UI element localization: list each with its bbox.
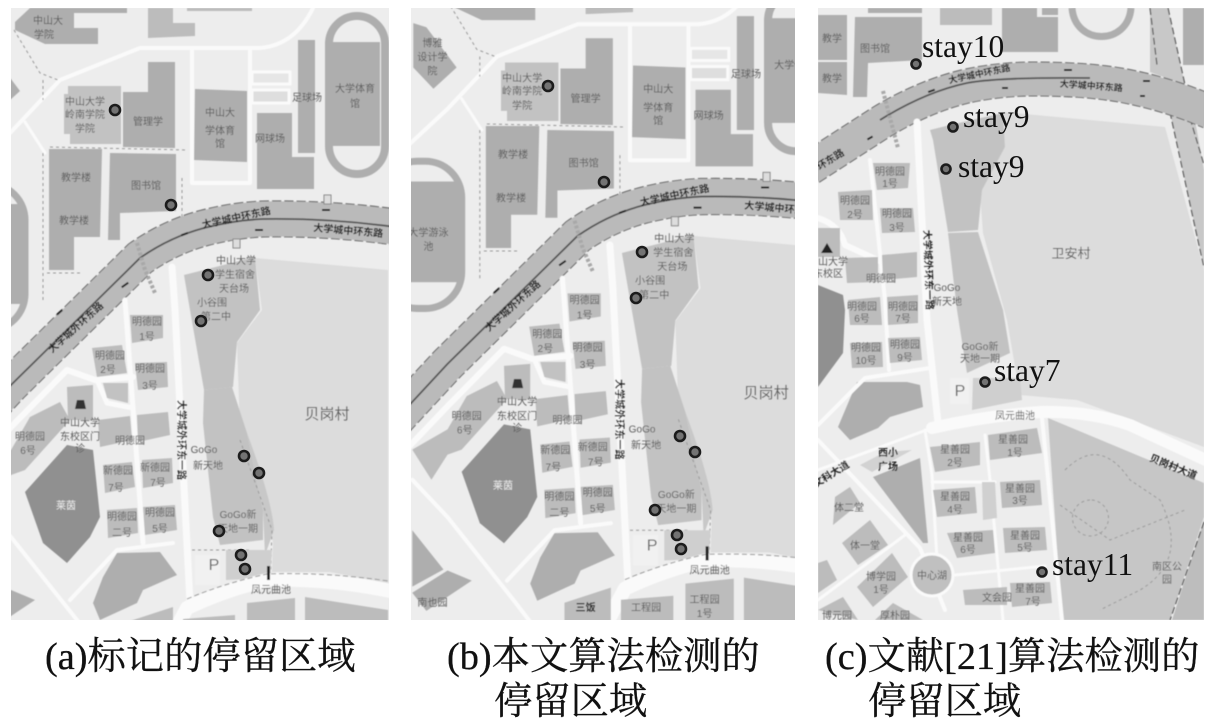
map: campus base map a: 中山大 — [33, 14, 63, 27]
caption: panel c: 停留区域 — [868, 680, 1021, 723]
map: campus base map a: 学体育 — [205, 124, 235, 137]
map: campus base map b: 大学城外环东一路 — [613, 379, 626, 460]
map: campus base map a: 莱茵 — [56, 500, 76, 512]
map: campus base map c: 明德园 — [875, 165, 905, 178]
map: campus base map b: 教学楼 — [496, 192, 526, 205]
map: campus base map a: 明德园 — [132, 315, 162, 328]
marker: detected stay 1 — [543, 81, 553, 91]
map: campus base map a: 中山大学 — [60, 416, 100, 429]
map: campus base map b: 足球场 — [731, 68, 761, 81]
map: campus base map c: 5号 — [1017, 542, 1033, 554]
map: campus base map a: 6号 — [20, 445, 36, 457]
map: campus base map a: 网球场 — [255, 132, 285, 145]
map: campus base map c: 体一堂 — [850, 540, 880, 552]
map: campus base map b: 中山大学 — [654, 232, 695, 245]
map: campus base map b: 明德园 — [544, 490, 575, 503]
map: campus base map a: 3号 — [142, 380, 158, 392]
map: campus base map c: 博学园 — [866, 570, 896, 583]
map: campus base map c: 东校区 — [813, 267, 843, 280]
map: campus base map a: 新天地 — [193, 459, 223, 472]
panel: (c) stay regions detected by algorithm of reference 21 — [806, 8, 1210, 622]
map: campus base map c: 1号 — [1007, 447, 1023, 459]
map: campus base map b: 明德园 — [573, 341, 603, 354]
map: campus base map b: 大学城外环东路 — [482, 277, 543, 334]
map: campus base map c: 明德园 — [888, 300, 918, 313]
map: campus base map c: 西小 — [878, 446, 898, 459]
map: campus base map a: 管理学 — [133, 115, 163, 128]
map: campus base map b: 1号 — [697, 608, 712, 620]
marker: stay point 9 — [240, 564, 250, 574]
map: campus base map c: 3号 — [1012, 495, 1028, 507]
map: campus base map c: 明德园 — [890, 338, 920, 351]
marker: detected stay 8 — [672, 530, 682, 540]
map: campus base map c: 6号 — [854, 313, 870, 325]
marker: detected stay 7 — [650, 505, 660, 515]
map: campus base map a: 明德园 — [95, 349, 125, 362]
map: campus base map a: 7号 — [150, 477, 166, 489]
map: campus base map c: 中环东路 — [806, 146, 847, 178]
map: campus base map b: 岭南学院 — [502, 85, 542, 98]
map: campus base map a: 大学城外环东路 — [45, 299, 106, 356]
map: campus base map b: 教学楼 — [498, 148, 528, 161]
map: campus base map b: 天台场 — [657, 260, 687, 273]
map: campus base map c: 文会园 — [982, 591, 1012, 604]
map: campus base map c: 卫安村 — [1051, 246, 1091, 261]
map: campus base map c: 大学城中环东路 — [947, 62, 1011, 86]
map: campus base map a: 岭南学院 — [65, 108, 105, 121]
map: campus base map c: 体二堂 — [834, 502, 864, 514]
map: campus base map c: GoGo新 — [962, 340, 998, 353]
map: campus base map c: 星善园 — [998, 433, 1028, 446]
marker: stay point 4 — [196, 316, 206, 326]
map: campus base map a: 东校区门 — [60, 430, 100, 443]
map: campus base map b: 贝岗村 — [743, 385, 789, 402]
map: campus base map c: 2号 — [847, 209, 863, 221]
map: campus base map b: 天地一期 — [656, 502, 697, 515]
map: campus base map c: 园 — [1162, 574, 1172, 586]
marker: stay point 6 — [254, 468, 264, 478]
map: campus base map c: 明德园 — [840, 194, 870, 207]
map: campus base map b: 网球场 — [693, 109, 724, 122]
map: campus base map a: 5号 — [152, 523, 168, 535]
map: campus base map c: P — [955, 383, 965, 400]
map: campus base map b: 池 — [423, 240, 433, 253]
map: campus base map a: 二号 — [112, 527, 132, 539]
caption: panel a: (a)标记的停留区域 — [45, 635, 356, 678]
label: stay10 with marker: stay10 — [922, 29, 1004, 64]
panel: (b) stay regions detected by this paper's algorithm — [411, 8, 795, 620]
map: campus base map a: 7号 — [108, 482, 124, 494]
map: campus base map a: 天台场 — [219, 282, 249, 295]
map: campus base map b: 诊 — [512, 421, 522, 434]
label: stay9 upper with marker: stay9 — [963, 99, 1030, 134]
map: campus base map c: 星善园 — [940, 490, 970, 503]
map: campus base map c: 星善园 — [940, 443, 970, 456]
map: campus base map c: 明德园 — [851, 341, 881, 354]
map: campus base map c: 明德园 — [882, 207, 912, 220]
map: campus base map a: 明德园 — [107, 510, 137, 523]
map: campus base map c: 中山大学 — [808, 255, 848, 268]
map: campus base map b: 三饭 — [576, 601, 596, 614]
label: stay11 with marker — [1036, 554, 1132, 582]
caption: panel b — [447, 635, 760, 723]
map: campus base map c: 明德园 — [866, 272, 896, 285]
map: campus base map b: 图书馆 — [569, 156, 599, 169]
map: campus base map c: 中心湖 — [917, 569, 947, 582]
caption: panel b: (b)本文算法检测的 — [447, 635, 760, 678]
map: campus base map a: 教学楼 — [59, 214, 89, 227]
map: campus base map a: 凤元曲池 — [251, 583, 291, 596]
map: campus base map a: 新德园 — [103, 464, 133, 477]
map: campus base map b: 明德园 — [570, 293, 600, 306]
map: campus base map a: 新德园 — [140, 461, 170, 474]
map: campus base map a: 明德园 — [15, 430, 45, 443]
map: campus base map b — [411, 8, 795, 620]
map: campus base map b: 明德园 — [552, 413, 583, 426]
map: campus base map a: 中山大学 — [65, 95, 105, 108]
map: campus base map a: 大学城中环东路 — [201, 204, 272, 231]
map: campus base map b: 大学城中环东路 — [639, 181, 710, 209]
label: stay10 with marker — [910, 36, 1004, 70]
map: campus base map a — [0, 8, 395, 650]
map: campus base map c: 星善园 — [1010, 529, 1040, 542]
map: campus base map b: 大学体育 — [774, 59, 814, 72]
map: campus base map a: 天地一期 — [218, 522, 258, 535]
map: campus base map b: 第二中 — [639, 288, 669, 301]
map: campus base map b: 6号 — [457, 424, 473, 436]
map: campus base map b: 馆 — [653, 114, 663, 127]
map: campus base map a: 学院 — [75, 122, 95, 135]
map: campus base map a: GoGo — [191, 445, 218, 456]
label: stay7 with marker: stay7 — [994, 353, 1060, 388]
map: campus base map b: 二号 — [549, 507, 570, 519]
map: campus base map c: 7号 — [895, 313, 911, 325]
marker: detected stay 4 — [631, 293, 641, 303]
map: campus base map c: 明德园 — [847, 300, 877, 313]
map: campus base map b: 大学城中环东路 — [744, 199, 815, 218]
marker: stay point 1 — [110, 105, 120, 115]
map: campus base map c: 4号 — [947, 504, 963, 516]
map: campus base map a: 2号 — [100, 364, 116, 376]
marker: detected stay 2 — [599, 177, 609, 187]
map: campus base map c: 1号 — [882, 178, 898, 190]
map: campus base map c: 2号 — [947, 457, 963, 469]
marker: detected stay 9 — [676, 544, 686, 554]
map: campus base map b: 工程园 — [631, 602, 661, 614]
marker: stay point 8 — [236, 550, 246, 560]
map: campus base map b: 学生宿舍 — [653, 246, 694, 259]
marker: detected stay 3 — [637, 247, 647, 257]
map: campus base map b: GoGo — [629, 424, 656, 435]
map: campus base map c: 博元园 — [822, 609, 852, 622]
label: stay7 with marker — [979, 360, 1060, 388]
map: campus base map b: 院 — [427, 65, 437, 78]
label: stay11 with marker: stay11 — [1052, 547, 1133, 582]
map: campus base map a: 1号 — [139, 331, 155, 343]
map: campus base map b: 莱茵 — [493, 480, 513, 492]
map: campus base map b: 5号 — [590, 503, 606, 515]
map: campus base map a: 馆 — [350, 97, 360, 110]
map: campus base map c: 教学 — [822, 32, 842, 45]
map: campus base map c: 7号 — [1025, 596, 1041, 608]
map: campus base map b: 中山大 — [643, 83, 673, 96]
caption: panel b: 停留区域 — [494, 680, 647, 723]
map: campus base map c: 贝岗村大道 — [1148, 451, 1199, 482]
map: campus base map b: 7号 — [588, 457, 604, 469]
map: campus base map b: 东校区门 — [497, 409, 537, 422]
map: campus base map a: 馆 — [215, 137, 225, 150]
map: campus base map b: 设计学 — [417, 50, 448, 63]
caption: panel c — [825, 635, 1199, 723]
label: stay9 upper with marker — [947, 106, 1028, 134]
map: campus base map b: 新德园 — [578, 441, 608, 454]
caption: panel c: (c)文献[21]算法检测的 — [825, 635, 1199, 678]
map: campus base map b: 3号 — [580, 359, 596, 371]
map: campus base map a: 图书馆 — [131, 179, 161, 192]
map: campus base map b: 管理学 — [571, 92, 601, 105]
map: campus base map a: 足球场 — [292, 91, 322, 104]
map: campus base map c: 南区公 — [1152, 560, 1182, 573]
map: campus base map c: 大学城外环东一路 — [921, 230, 936, 310]
map: campus base map b: GoGo新 — [658, 488, 695, 501]
map: campus base map c: 图书馆 — [860, 42, 890, 55]
map: campus base map b: 博雅 — [422, 36, 443, 49]
marker: detected stay 6 — [690, 447, 700, 457]
map: campus base map b: 南也园 — [417, 596, 448, 609]
map: campus base map a: 小谷围 — [197, 297, 227, 309]
map: campus base map c: 教学 — [822, 72, 842, 85]
map: campus base map a: 中山大学 — [216, 254, 256, 267]
map: campus base map a: 大学城中环东路 — [313, 221, 384, 240]
map: campus base map c: 凤元曲池 — [995, 409, 1035, 422]
map: campus base map b: 新天地 — [631, 439, 661, 452]
map: campus base map b: 明德园 — [583, 486, 613, 499]
map: campus base map c — [806, 8, 1210, 622]
map: campus base map c: 大学城中环东路 — [1059, 78, 1123, 93]
map: campus base map a: 明德园 — [135, 362, 165, 375]
map: campus base map a: 学院 — [34, 28, 54, 41]
marker: stay point 3 — [203, 270, 213, 280]
label: stay9 lower with marker: stay9 — [958, 149, 1024, 184]
map: campus base map a: 明德园 — [145, 506, 175, 519]
map: campus base map c: 1号 — [873, 584, 889, 596]
map: campus base map a: 贝岗村 — [304, 406, 350, 423]
map: campus base map c: GoGo — [934, 283, 961, 294]
marker: stay point 7 — [214, 526, 224, 536]
map: campus base map a: P — [209, 557, 219, 574]
map: campus base map c: 6号 — [960, 544, 976, 556]
map: campus base map a: 诊 — [75, 442, 85, 455]
map: campus base map c: 3号 — [889, 222, 905, 234]
map: campus base map b: 凤元曲池 — [689, 564, 730, 577]
map: campus base map c: 文科大道 — [811, 458, 852, 490]
marker: detected stay 5 — [675, 431, 685, 441]
map: campus base map b: 大学游泳 — [408, 226, 449, 239]
map: campus base map a: 明德园 — [115, 434, 145, 447]
map: campus base map a: GoGo新 — [220, 508, 256, 521]
map: campus base map a: 大学体育 — [335, 82, 375, 95]
map: campus base map b: 1号 — [577, 310, 592, 322]
map: campus base map b: 中山大学 — [502, 72, 542, 85]
map: campus base map b: 学体育 — [643, 101, 673, 114]
map: campus base map c: 厚朴园 — [880, 609, 910, 622]
map: campus base map a: 第二中 — [201, 310, 231, 323]
map: campus base map b: 小谷围 — [635, 275, 665, 287]
label: stay9 lower with marker — [940, 156, 1024, 184]
map: campus base map a: 学生宿舍 — [215, 268, 255, 281]
map: campus base map c: 新天地 — [932, 295, 962, 308]
map: campus base map c: 星善园 — [1005, 482, 1035, 495]
map: campus base map b: 新德园 — [540, 444, 571, 457]
map: campus base map c: 9号 — [897, 352, 913, 364]
map: campus base map c: 星善园 — [1015, 582, 1045, 595]
map: campus base map b: 7号 — [546, 462, 561, 474]
panel: (a) labelled stay regions map — [0, 8, 395, 650]
map: campus base map b: 中山大学 — [497, 395, 537, 408]
map: campus base map c: 天地一期 — [960, 352, 1000, 365]
map: campus base map c: 10号 — [855, 355, 877, 367]
map: campus base map c: 星善园 — [953, 531, 983, 544]
map: campus base map b: 明德园 — [452, 409, 482, 422]
map: campus base map a: 教学楼 — [61, 171, 91, 184]
map: campus base map b: 学院 — [512, 99, 532, 112]
map: campus base map c: 广场 — [878, 460, 898, 473]
map: campus base map a: 中山大 — [205, 106, 235, 119]
map: campus base map b: 明德园 — [532, 328, 562, 341]
map: campus base map a: 大学城外环东一路 — [175, 400, 188, 480]
map: campus base map b: P — [647, 536, 658, 554]
map: campus base map b: 2号 — [537, 343, 553, 355]
marker: stay point 5 — [239, 451, 249, 461]
marker: stay point 2 — [166, 200, 176, 210]
map: campus base map b: 工程园 — [689, 594, 720, 606]
